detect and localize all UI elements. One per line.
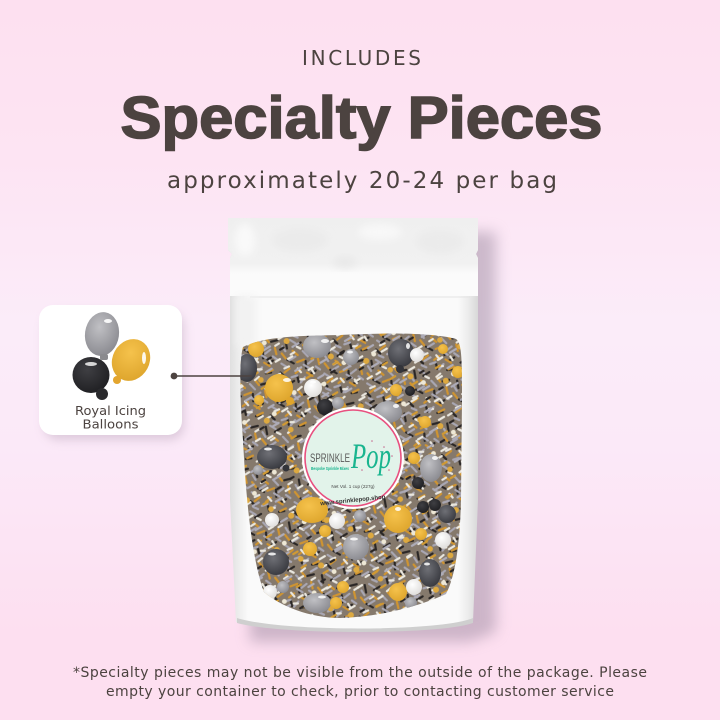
round sprinkles and balloons	[237, 334, 464, 613]
icon: black balloon	[72, 357, 110, 400]
url: www.sprinklepop.shop	[319, 495, 386, 508]
card label	[75, 403, 146, 432]
product bag	[228, 218, 496, 642]
label sticker	[302, 407, 404, 509]
bag body	[228, 218, 478, 631]
net weight: Net Vol. 1 cup (227g)	[331, 484, 375, 489]
callout card: royal icing balloons	[39, 305, 184, 440]
bag shadow	[250, 232, 496, 642]
subtitle: approximately 20-24 per bag	[167, 168, 557, 194]
balloon highlights	[264, 339, 438, 598]
sticker confetti dots	[355, 440, 393, 471]
brand script: Pop	[350, 436, 391, 476]
bag top texture	[228, 218, 478, 298]
card label: Balloons	[82, 416, 138, 432]
title: Specialty Pieces	[120, 85, 602, 151]
footnote	[73, 665, 647, 700]
brand name: SPRINKLE	[310, 453, 350, 465]
card label: Royal Icing	[75, 403, 146, 418]
sprinkle mix	[235, 330, 467, 625]
icon: gray balloon	[82, 310, 122, 360]
callout connector	[171, 373, 252, 379]
heading: includes: INCLUDES	[302, 46, 421, 70]
bag bottom edge	[237, 618, 473, 632]
footnote: empty your container to check, prior to contacting customer service	[106, 684, 614, 700]
tagline: Bespoke Sprinkle Mixes	[311, 466, 349, 471]
card shadow	[44, 312, 184, 440]
card	[39, 305, 182, 435]
footnote: *Specialty pieces may not be visible from the outside of the package. Please	[73, 665, 647, 681]
icon: gold balloon	[105, 332, 157, 388]
